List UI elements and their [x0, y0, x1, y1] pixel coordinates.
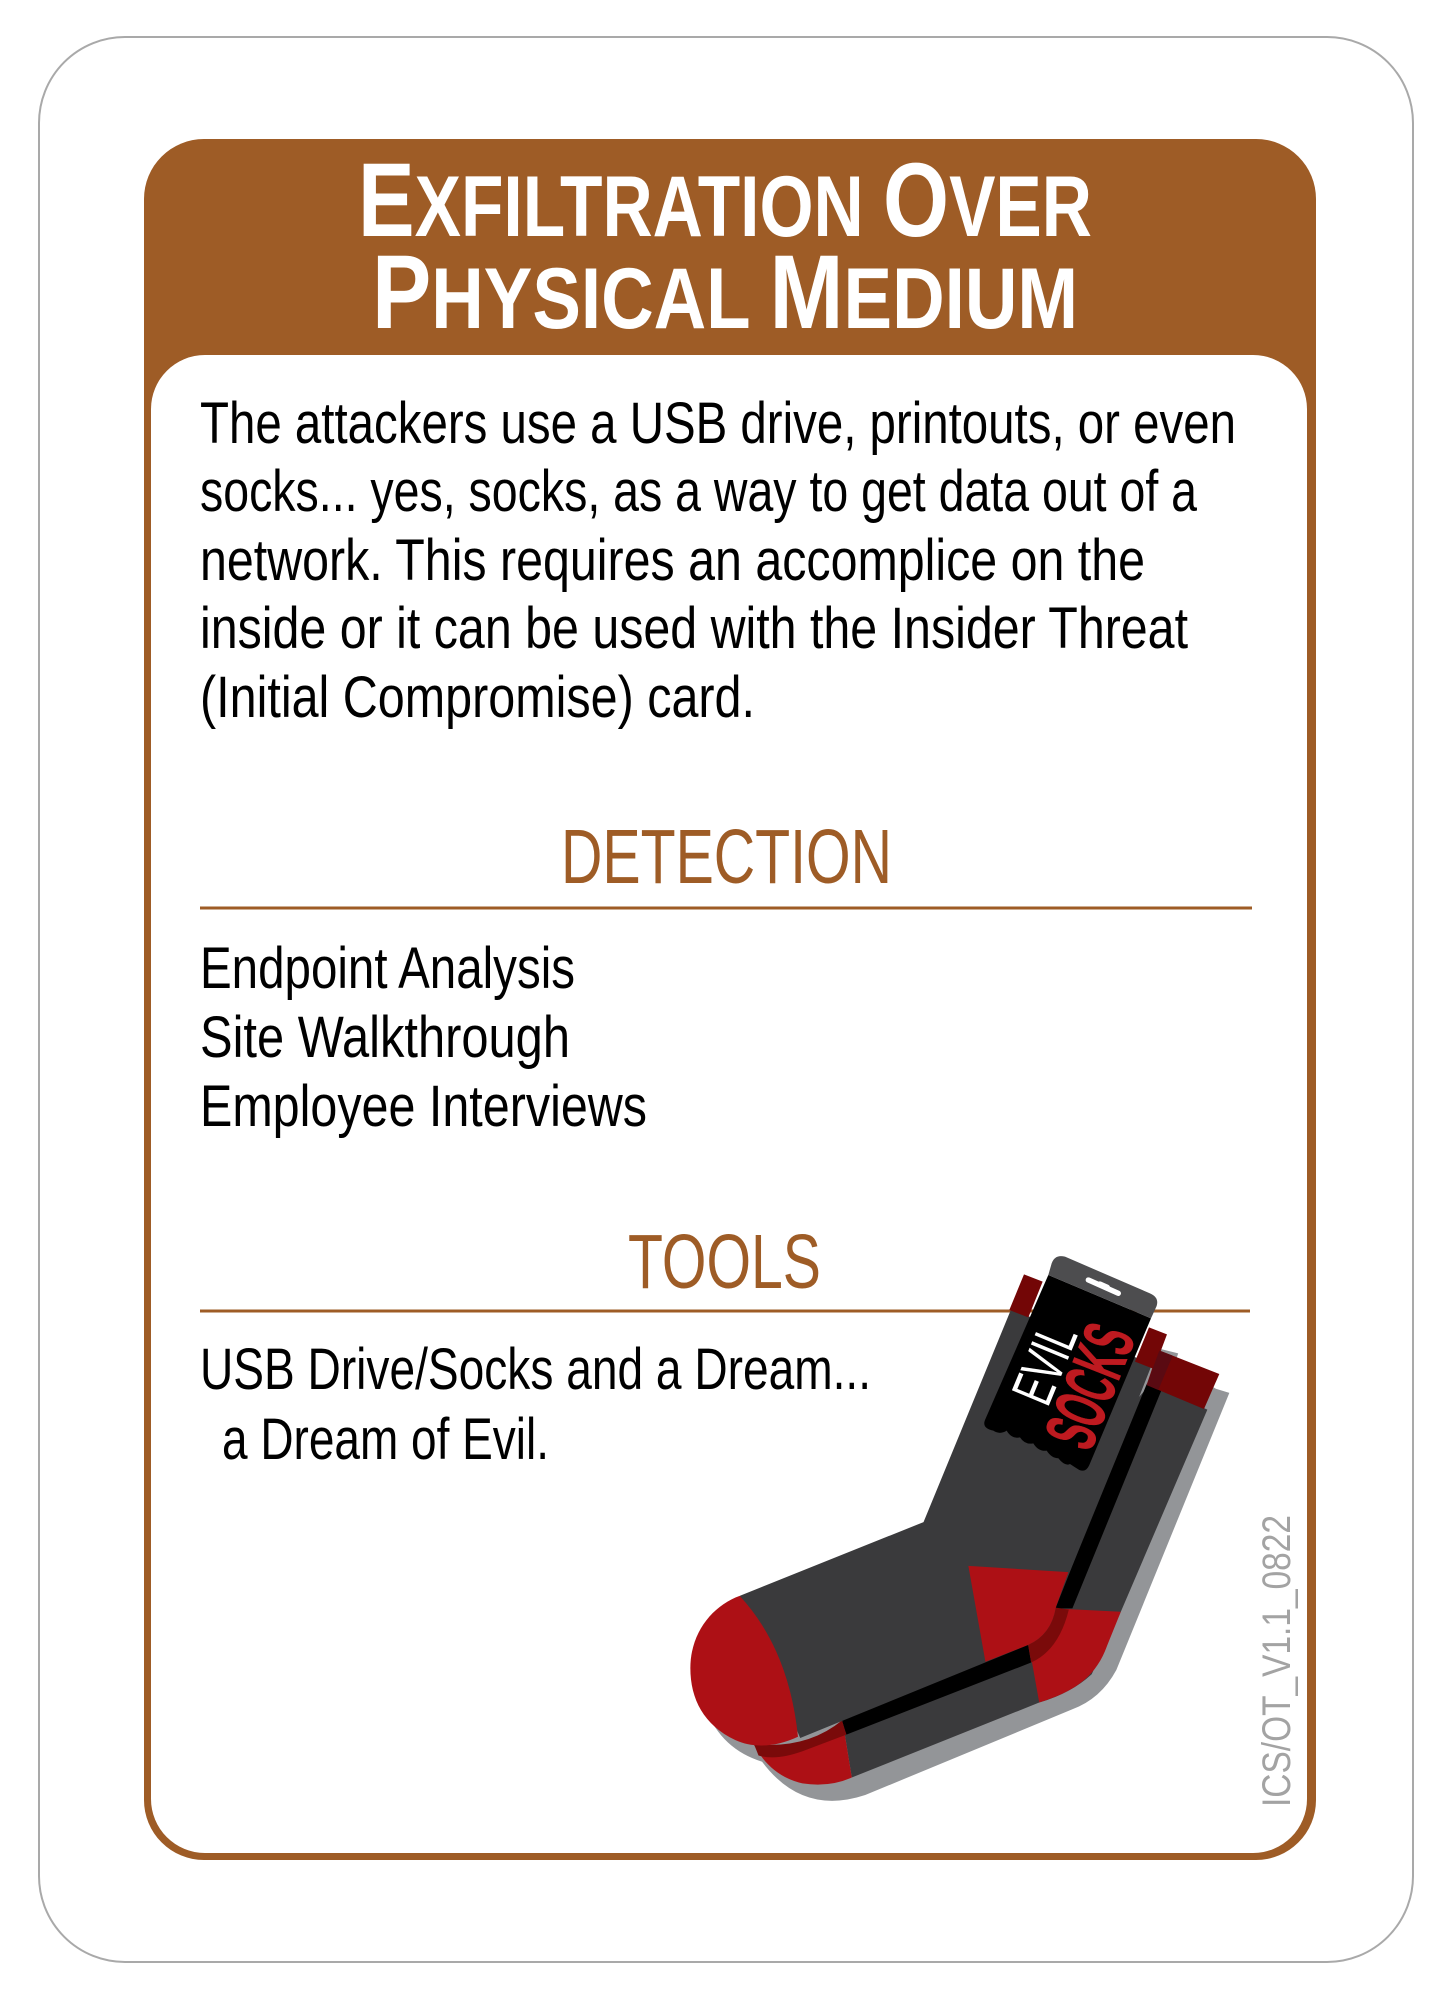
- front cuff: [1009, 1274, 1167, 1369]
- tools list: [200, 1337, 871, 1472]
- front heel: [968, 1566, 1068, 1662]
- version label: ICS/OT_V1.1_0822: [1255, 1515, 1299, 1807]
- back sock: [843, 1385, 1207, 1778]
- cuff overlap: [1147, 1351, 1173, 1390]
- front sock: [740, 1310, 1152, 1738]
- tag body: [984, 1275, 1151, 1471]
- overlap shading: [754, 1608, 1069, 1757]
- stripe: [842, 1384, 1161, 1735]
- sock bodies: [690, 1310, 1229, 1801]
- back heel: [1029, 1608, 1121, 1703]
- description text: network. This requires an accomplice on the: [200, 528, 1145, 593]
- detection list: Employee Interviews: [200, 1074, 647, 1139]
- description text: The attackers use a USB drive, printouts, or even: [200, 391, 1236, 456]
- detection list: [200, 936, 647, 1139]
- front toe: [690, 1596, 798, 1746]
- description text: [200, 391, 1236, 730]
- tag header: [1048, 1256, 1157, 1318]
- title: EXFILTRATION OVER: [358, 142, 1092, 259]
- description text: socks... yes, socks, as a way to get data out of a: [200, 459, 1198, 524]
- icon: socks illustration: [690, 1256, 1229, 1801]
- title: PHYSICAL MEDIUM: [372, 234, 1078, 351]
- description text: inside or it can be used with the Insider Threat: [200, 596, 1188, 661]
- description text: (Initial Compromise) card.: [200, 665, 755, 730]
- evil: EVIL: [1001, 1315, 1090, 1413]
- detection list: Endpoint Analysis: [200, 936, 575, 1001]
- heading: detection: DETECTION: [561, 814, 892, 900]
- socks: SOCKS: [1030, 1314, 1151, 1459]
- panel: brown card frame: [144, 139, 1316, 1860]
- heading: tools: TOOLS: [628, 1219, 821, 1305]
- back cuff: [1147, 1350, 1219, 1409]
- title: [358, 142, 1092, 351]
- panel: white content area: [151, 355, 1307, 1853]
- tools list: a Dream of Evil.: [222, 1407, 549, 1472]
- detection list: Site Walkthrough: [200, 1005, 570, 1070]
- back toe: [754, 1722, 852, 1785]
- sock tag and cuffs: [984, 1256, 1219, 1471]
- sock shadow: [706, 1349, 1229, 1801]
- tools list: USB Drive/Socks and a Dream...: [200, 1337, 871, 1402]
- tag hole: [1088, 1280, 1118, 1293]
